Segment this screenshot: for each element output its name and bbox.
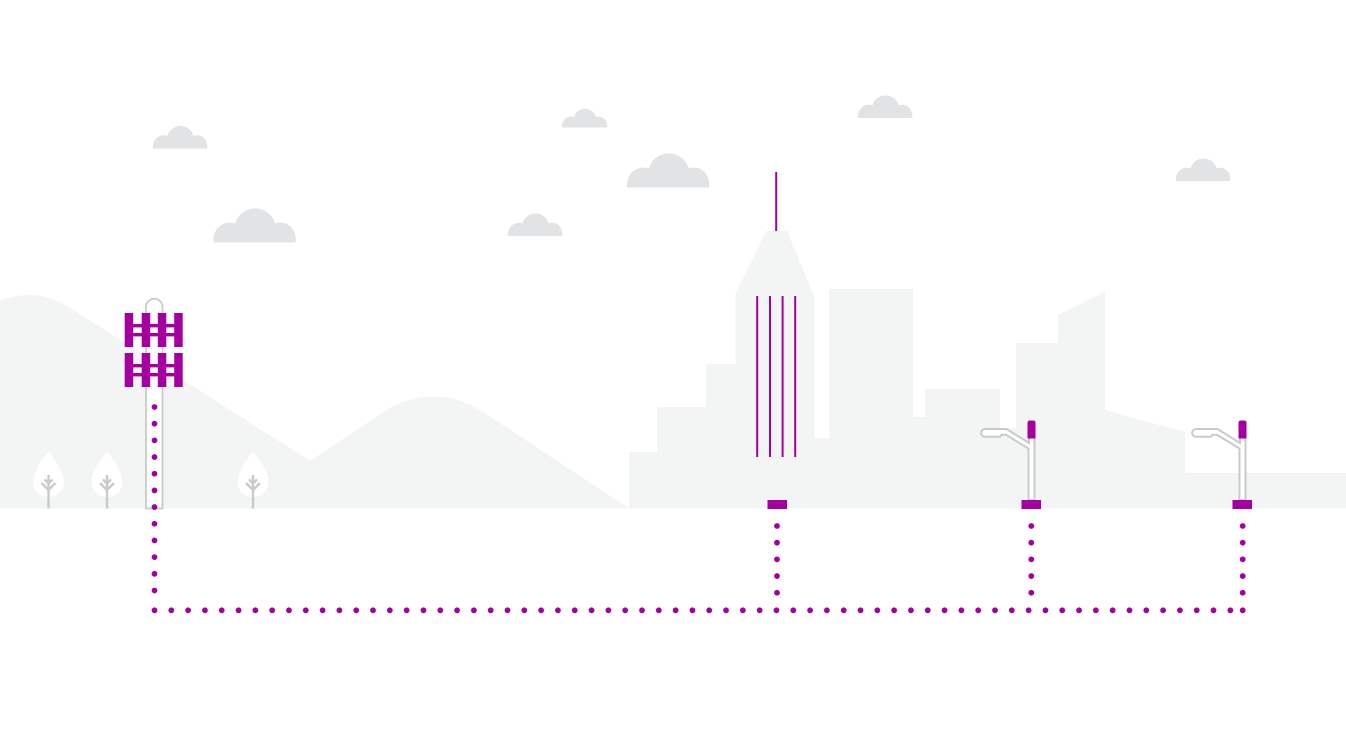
- tree 3: [238, 451, 268, 508]
- cloud 5: [508, 214, 562, 236]
- street lamp 1: [981, 420, 1041, 509]
- cloud 4: [627, 153, 709, 188]
- cloud 7: [1176, 159, 1230, 181]
- tree 1: [33, 451, 64, 508]
- skyscraper base unit: [768, 500, 787, 509]
- dotted connection lines: [154, 407, 1243, 610]
- cloud 6: [858, 96, 912, 118]
- cloud 3: [562, 109, 607, 128]
- cell tower: [125, 299, 183, 508]
- antenna panel upper: [125, 313, 183, 347]
- skyscraper spire antenna: [775, 172, 777, 231]
- hills: [0, 295, 629, 508]
- skyscraper vertical cables: [756, 296, 796, 457]
- antenna panel lower: [125, 353, 183, 387]
- tower mast: [146, 299, 162, 508]
- cloud 2: [214, 208, 296, 242]
- cloud 1: [153, 126, 207, 148]
- tree 2: [92, 451, 122, 508]
- city skyline: [629, 231, 1346, 508]
- street lamp 2: [1192, 420, 1252, 509]
